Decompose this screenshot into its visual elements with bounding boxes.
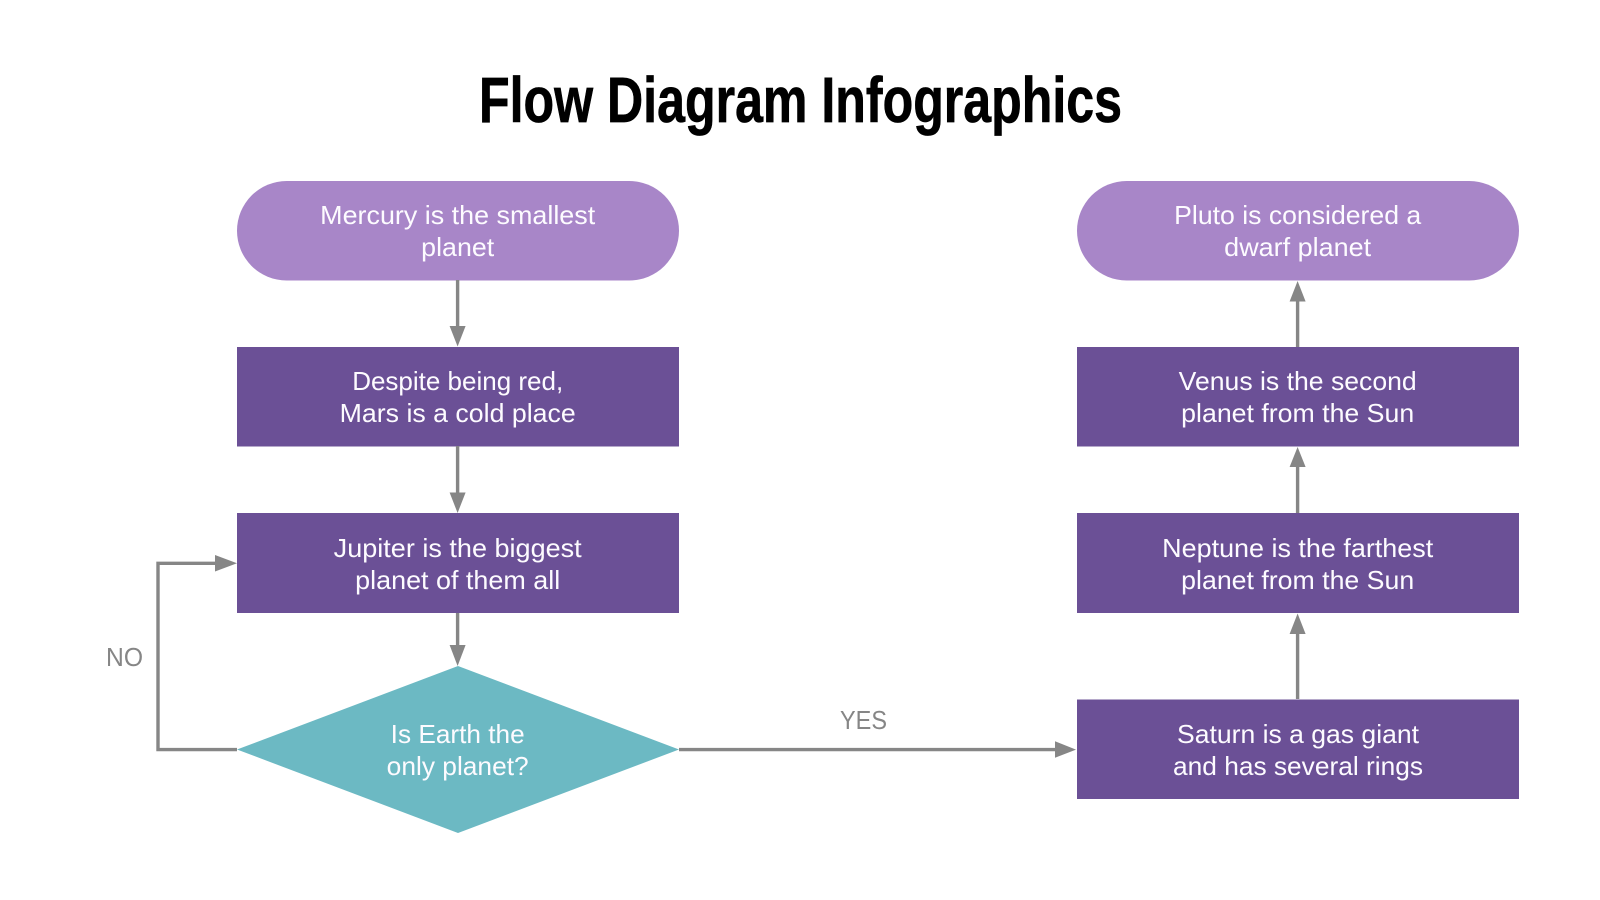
panel: Saturn process box: [1077, 700, 1519, 799]
panel: Jupiter process box: [237, 513, 679, 613]
label: YES: YES: [840, 705, 887, 735]
panel: Venus process box: planet from the Sun: [1181, 398, 1414, 428]
panel: Neptune process box: [1077, 513, 1519, 613]
title: Flow Diagram Infographics: [479, 64, 1122, 136]
panel: Pluto end terminator: dwarf planet: [1224, 232, 1372, 262]
panel: Pluto end terminator: [1077, 181, 1519, 280]
panel: Earth decision diamond: Is Earth the: [391, 719, 525, 749]
label: NO: NO: [106, 642, 143, 672]
panel: Mercury start terminator: [237, 181, 679, 280]
arrow: NO loop back to Jupiter: [158, 555, 237, 750]
panel: Mercury start terminator: Mercury is the smallest: [320, 200, 596, 230]
panel: Mars process box: [237, 347, 679, 446]
panel: Mercury start terminator: planet: [421, 232, 495, 262]
panel: Venus process box: Venus is the second: [1179, 366, 1417, 396]
panel: Saturn process box: and has several rings: [1173, 751, 1423, 781]
arrow: Neptune to Venus: [1290, 447, 1306, 513]
arrow: Mercury to Mars: [450, 280, 466, 346]
panel: Earth decision diamond: only planet?: [387, 751, 529, 781]
arrow: Mars to Jupiter: [450, 446, 466, 513]
panel: Mars process box: Despite being red,: [352, 366, 563, 396]
panel: Jupiter process box: planet of them all: [355, 565, 560, 595]
panel: Neptune process box: planet from the Sun: [1181, 565, 1414, 595]
panel: Jupiter process box: Jupiter is the biggest: [334, 533, 583, 563]
panel: Earth decision diamond: [237, 666, 679, 833]
panel: Pluto end terminator: Pluto is considered a: [1174, 200, 1422, 230]
arrow: Jupiter to Earth decision: [450, 613, 466, 666]
panel: Mars process box: Mars is a cold place: [340, 398, 576, 428]
panel: Saturn process box: Saturn is a gas giant: [1177, 719, 1420, 749]
panel: Venus process box: [1077, 347, 1519, 446]
panel: Neptune process box: Neptune is the farthest: [1162, 533, 1434, 563]
arrow: Venus to Pluto: [1290, 281, 1306, 347]
arrow: YES to Saturn: [679, 741, 1076, 758]
arrow: Saturn to Neptune: [1290, 614, 1306, 699]
